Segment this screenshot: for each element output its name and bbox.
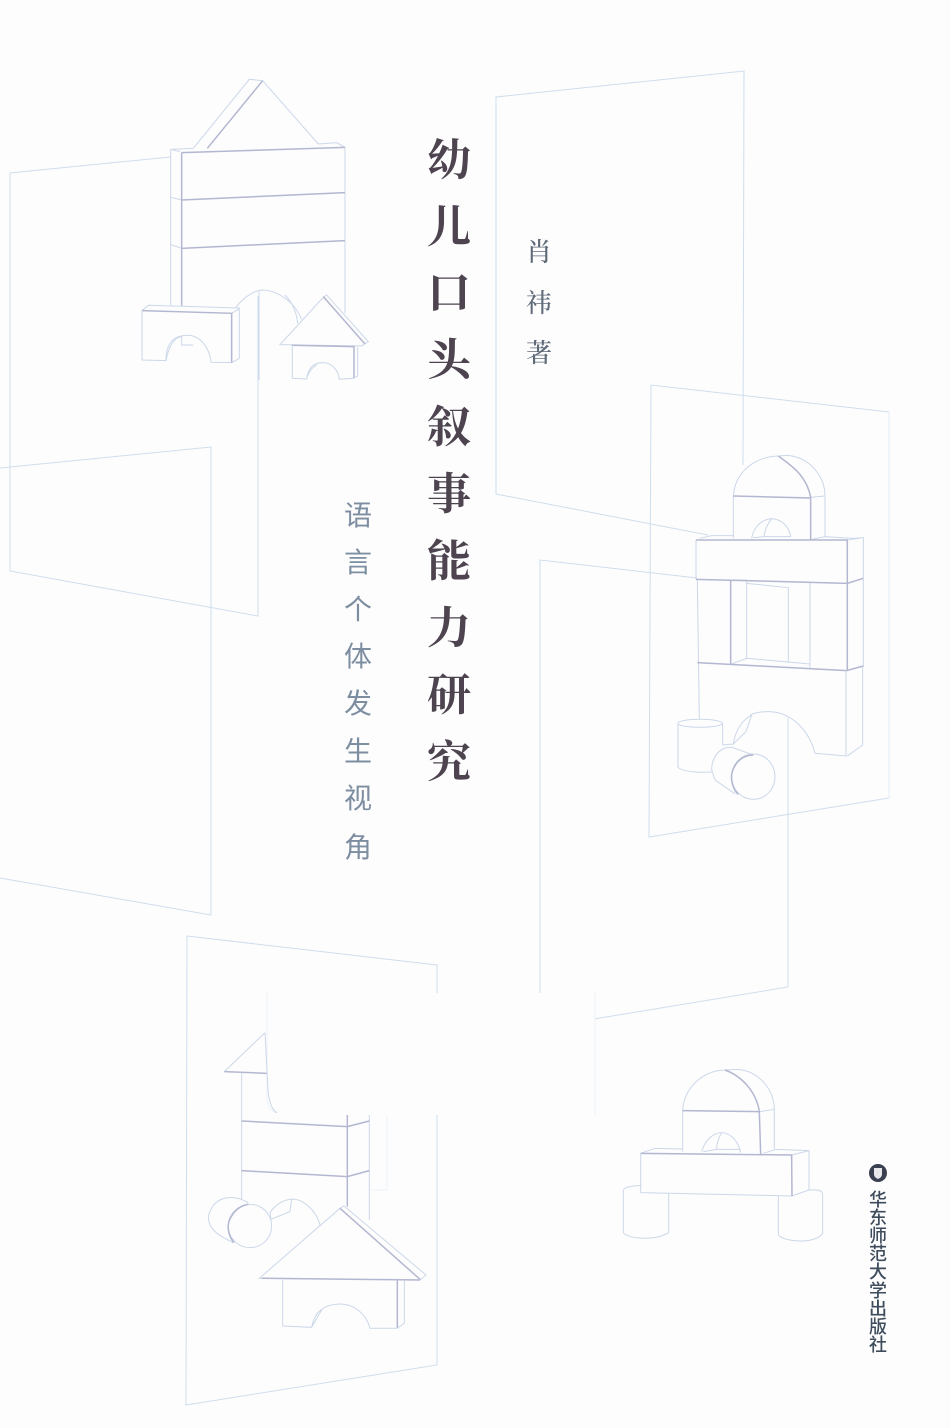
title: 究 [427, 738, 471, 787]
subtitle: 发 [344, 688, 372, 719]
publisher name: 东 [869, 1208, 887, 1228]
panel: middle left plane [0, 447, 211, 915]
publisher name: 范 [869, 1244, 887, 1264]
publisher name [869, 1190, 887, 1355]
title: 叙 [427, 403, 471, 452]
faint plane remnants [267, 993, 595, 1190]
icon: block tower upper left [142, 79, 368, 380]
author: 著 [526, 339, 552, 368]
panel: upper right plane [496, 71, 744, 535]
title: 力 [427, 604, 471, 653]
publisher name: 出 [869, 1299, 887, 1319]
panel: lower left plane [186, 936, 437, 1405]
title: 能 [427, 537, 471, 586]
title [427, 136, 475, 787]
white patch over the planes [267, 993, 595, 1115]
author: 肖 [526, 238, 552, 267]
icon: publisher logo [869, 1164, 887, 1182]
subtitle: 生 [344, 736, 372, 767]
subtitle: 体 [344, 641, 372, 672]
publisher name: 华 [869, 1190, 887, 1210]
publisher name: 社 [869, 1335, 887, 1355]
publisher name: 大 [869, 1262, 887, 1282]
title: 幼 [427, 136, 471, 185]
panel: middle right plane [649, 385, 889, 837]
panel: middle right plane far edge [888, 412, 890, 798]
subtitle: 个 [344, 594, 372, 625]
title: 口 [427, 269, 471, 318]
panel: lower centre plane [540, 560, 788, 1019]
icon: block tower lower right [623, 1069, 823, 1241]
publisher name: 师 [869, 1226, 887, 1246]
subtitle [344, 500, 372, 863]
publisher name: 版 [869, 1317, 887, 1337]
title: 研 [427, 671, 471, 720]
publisher name: 学 [869, 1281, 887, 1301]
subtitle: 言 [344, 547, 372, 578]
author [526, 238, 552, 368]
panel: upper left plane [10, 157, 258, 616]
subtitle: 角 [344, 832, 372, 863]
title: 事 [427, 470, 471, 519]
title: 儿 [427, 203, 471, 252]
title: 头 [427, 336, 475, 385]
subtitle: 语 [344, 500, 372, 531]
subtitle: 视 [344, 783, 372, 814]
author: 祎 [526, 289, 552, 318]
icon: block tower lower left [208, 1033, 426, 1328]
icon: block tower middle right [678, 455, 863, 799]
